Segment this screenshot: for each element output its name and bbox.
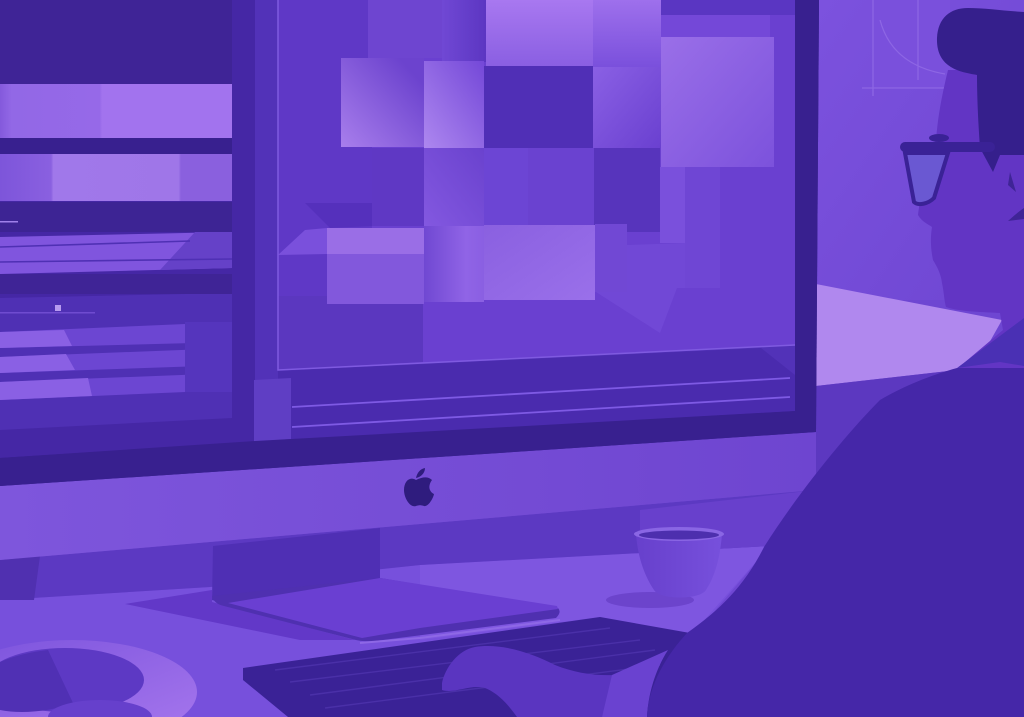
coffee cup [606, 527, 724, 608]
stand shadow [125, 590, 355, 640]
base light edge [360, 620, 560, 643]
desk surface [0, 546, 770, 717]
stand neck [212, 528, 380, 604]
timeline bar [278, 348, 795, 441]
designer [442, 8, 1024, 717]
hand [442, 646, 615, 717]
sleeve cuff [602, 650, 668, 717]
left panel bars [0, 84, 232, 400]
cup shadow [606, 592, 694, 608]
monitor [0, 0, 819, 560]
small side tool strip [254, 378, 291, 442]
glasses top bar [905, 142, 990, 152]
screen frame line [278, 0, 795, 370]
apple logo [404, 468, 434, 506]
keyboard [243, 617, 690, 717]
monitor shadow on the wall [0, 490, 816, 600]
monitor bezel [0, 0, 819, 486]
lower wall band [760, 368, 975, 560]
left panel background [0, 0, 258, 458]
glasses lens [905, 153, 948, 204]
timeline stripes bottom [0, 322, 232, 348]
screen tiles [278, 0, 795, 333]
head and neck [918, 70, 1024, 368]
collar [957, 318, 1024, 368]
base front edge [212, 578, 560, 641]
lower bezel edge [795, 0, 819, 432]
base top [228, 578, 558, 638]
torso [647, 364, 1024, 717]
screen main area [278, 0, 795, 370]
wall art sketch [862, 0, 950, 96]
hair [937, 8, 1024, 172]
mouse pad object [0, 640, 197, 717]
timeline stripes top [0, 232, 232, 274]
eyeglasses [905, 134, 990, 204]
screen surround [255, 0, 804, 441]
desk back panel [816, 284, 1002, 386]
ear and shadow [1008, 172, 1024, 221]
monitor chin [0, 430, 816, 560]
stand and base [125, 528, 560, 643]
